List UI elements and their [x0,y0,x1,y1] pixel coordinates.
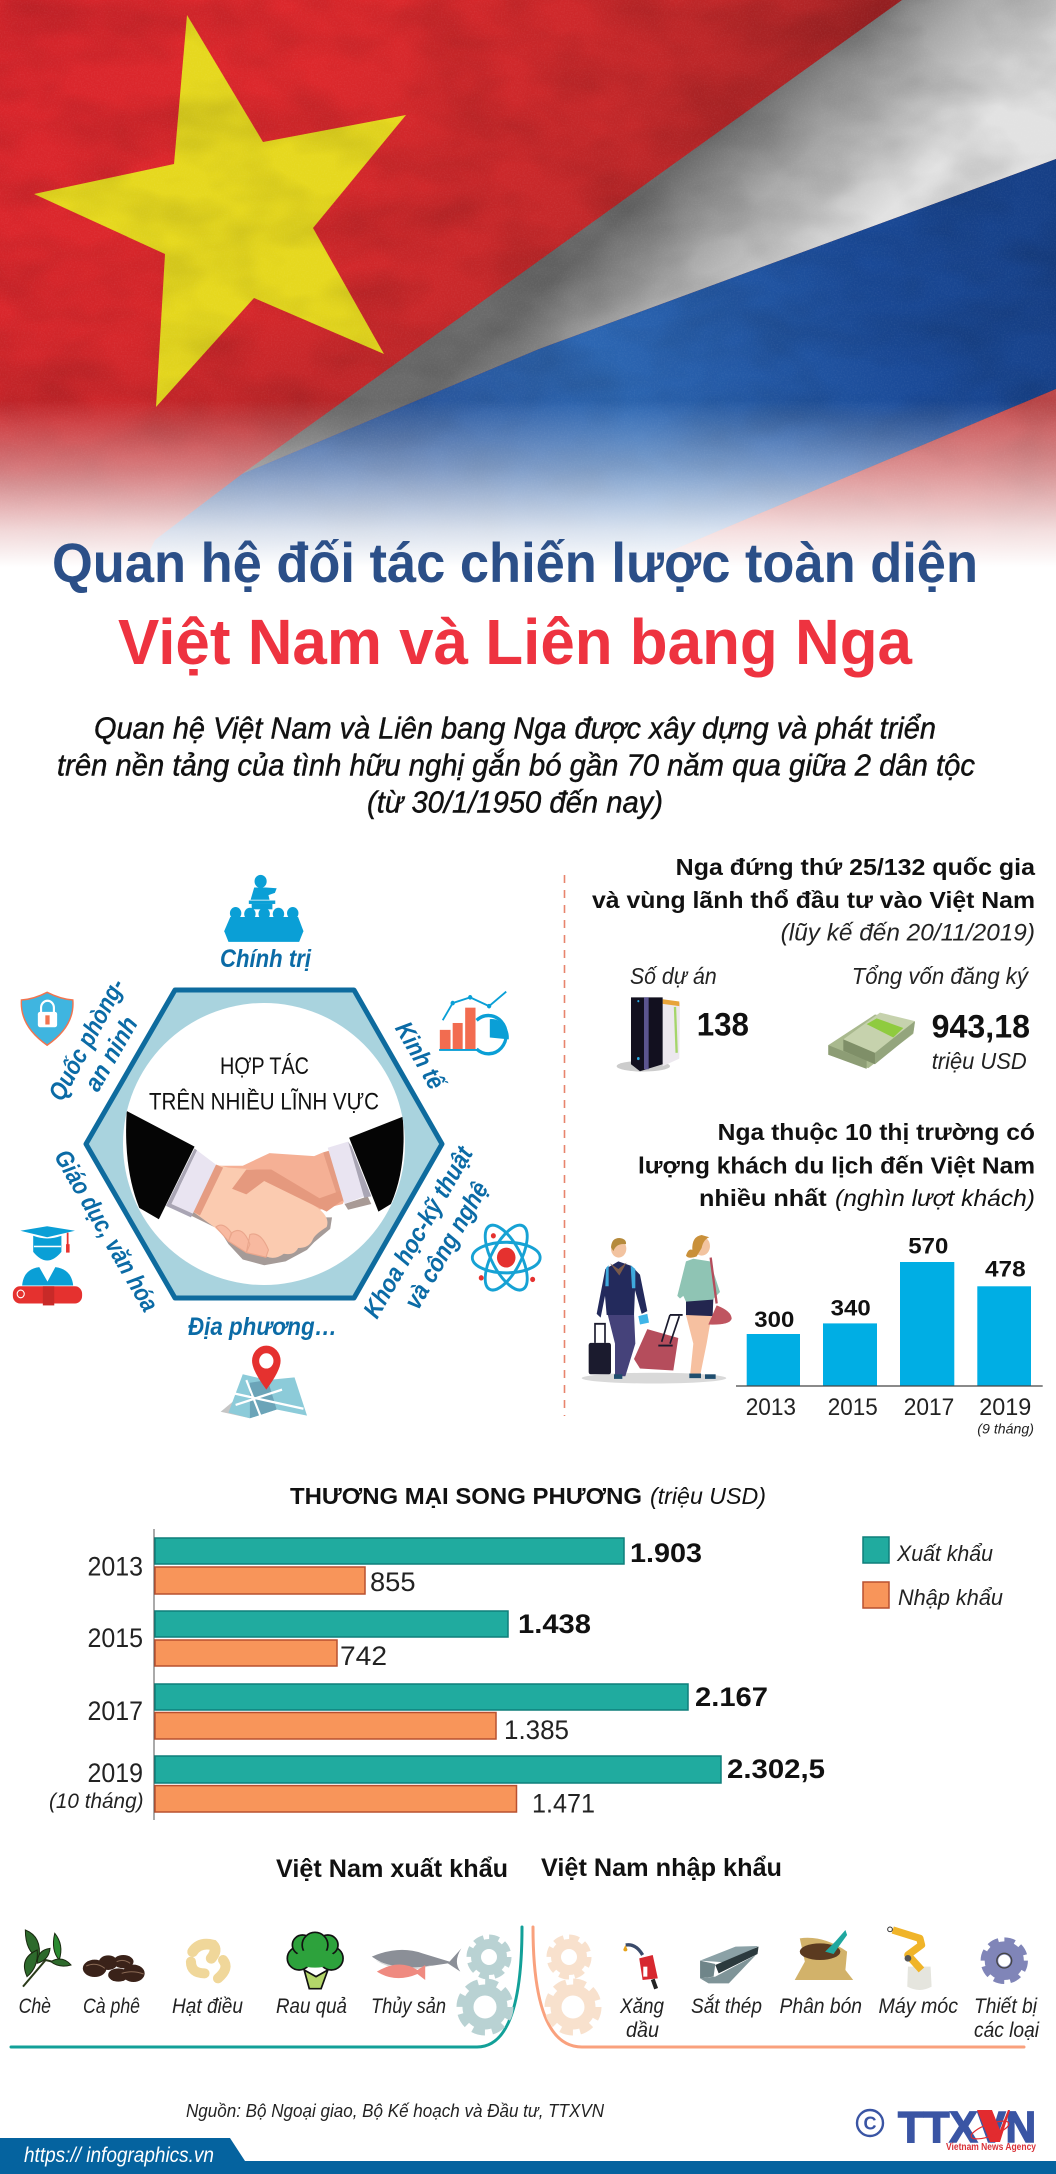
label: Địa phương: Địa phương… [188,1313,337,1341]
labels: imports [619,1993,1040,2042]
bar chart: trade: 2013 [88,1552,143,1582]
bar chart: tourists: 340 [831,1296,871,1321]
icon: fish [372,1948,461,1980]
title line 2: Việt Nam và Liên bang Nga [118,606,912,678]
hero: flags of Vietnam and Russia [0,0,1056,574]
logo: TTXVN: C [864,2114,876,2134]
bar chart: trade: 1.903 [630,1538,702,1568]
heading: investment rank: và vùng lãnh thổ đầu tư vào Việt Nam [592,887,1035,913]
panel: tourism [582,1119,1043,1437]
bar chart: trade: 1.438 [518,1609,591,1639]
bar chart: tourists: 2015 [828,1394,878,1421]
icon: yellow star [34,15,406,407]
labels: imports: Xăng [619,1994,664,2018]
center label: HỢP TÁC [220,1053,309,1080]
bar chart: tourists: 478 [985,1257,1026,1282]
hexagon [86,990,442,1298]
footer bar [0,2138,1056,2174]
panel: bilateral trade [49,1483,1003,1820]
icon: gears orange [549,1938,597,2031]
icon: security shield [21,992,73,1045]
illustration: travellers [582,1235,732,1383]
number: 138 projects: 138 [697,1007,749,1043]
icon: money stack [828,1013,915,1069]
bar chart: tourists: 2013 [746,1394,796,1421]
heading: imports: Việt Nam nhập khẩu [541,1854,782,1882]
labels: imports: Phân bón [780,1994,862,2018]
center label [149,1053,379,1116]
legend [863,1537,1003,1610]
bar chart: trade: 1.385 [504,1715,569,1745]
frame line: orange [533,1927,1024,2047]
heading: investment rank: Nga đứng thứ 25/132 quốc gia [676,854,1036,880]
icon: tea [23,1930,71,1987]
labels: exports: Hạt điều [172,1994,243,2018]
divider: dashed vertical line [564,875,566,1416]
bar chart: trade: 1.471 [532,1788,595,1818]
center label: TRÊN NHIỀU LĨNH VỰC [149,1088,379,1116]
panel: exports [11,1855,522,2047]
icon: gears teal [461,1938,509,2031]
bar chart: trade: 855 [370,1567,416,1597]
illustration: handshake [126,1111,404,1265]
label: Khoa học-kỹ thuật và công nghệ: Khoa học-kỹ thuật [358,1141,479,1323]
number: 943,18 million USD [932,1008,1030,1074]
legend: Nhập khẩu [898,1585,1003,1610]
heading: tourist market [638,1119,1035,1211]
icon: cashew [191,1944,226,1978]
labels: exports: Thủy sản [371,1994,446,2018]
labels: imports: dầu [626,2018,659,2042]
icon: broccoli [287,1932,343,1989]
icon: steel beam [700,1946,759,1983]
icon: server [617,997,680,1072]
bar chart: tourists: 2017 [904,1394,954,1421]
icon: coffee [83,1955,145,1982]
heading: tourist market: Nga thuộc 10 thị trường có [718,1119,1035,1145]
number: 943,18 million USD: triệu USD [932,1048,1027,1074]
bar chart: trade: 742 [340,1641,387,1671]
labels: exports: Chè [19,1994,51,2018]
icon: fuel nozzle [623,1945,658,1989]
icon: fertilizer sack [795,1930,853,1980]
label: Quốc phòng - an ninh: Quốc phòng- [43,974,131,1105]
label: Khoa học-kỹ thuật và công nghệ: và công nghệ [399,1177,494,1314]
legend: Xuất khẩu [896,1541,993,1566]
labels: exports: Rau quả [276,1994,347,2018]
heading: bilateral trade: THƯƠNG MẠI SONG PHƯƠNG [290,1483,642,1509]
icon: atom [472,1218,540,1297]
number: 943,18 million USD: 943,18 [932,1008,1030,1044]
heading: exports: Việt Nam xuất khẩu [276,1855,508,1883]
title line 1: Quan hệ đối tác chiến lược toàn diện [52,531,978,594]
logo: TTXVN: TTXVN [898,2103,1036,2152]
label: number of projects: Số dự án [630,963,717,989]
intro text: Quan hệ Việt Nam và Liên bang Nga được xây dựng và phát triển [94,710,936,746]
label: Chính trị: Chính trị [220,945,312,973]
note: cumulative date: (lũy kế đến 20/11/2019) [781,920,1035,947]
bar chart: tourists [736,1234,1043,1437]
source note: Nguồn: Bộ Ngoại giao, Bộ Kế hoạch và Đầu tư, TTXVN [186,2100,605,2121]
blue stripe [140,159,1056,570]
labels: imports: Máy móc [878,1994,958,2018]
bar chart: trade: 2017 [88,1696,143,1726]
intro text [57,710,975,820]
heading: tourist market: (nghìn lượt khách) [835,1185,1035,1211]
labels: imports: các loại [974,2018,1040,2042]
red stripe of Russian flag [610,389,1056,570]
heading: bilateral trade: (triệu USD) [650,1483,766,1509]
logo: TTXVN: Vietnam News Agency [946,2142,1036,2153]
bar chart: tourists: 2019 [979,1394,1031,1421]
label: Quốc phòng - an ninh: an ninh [79,1012,144,1096]
intro text: trên nền tảng của tình hữu nghị gắn bó gần 70 năm qua giữa 2 dân tộc [57,748,975,782]
bar chart: trade: 2.302,5 [727,1754,825,1784]
panel: cooperation hexagon [13,875,540,1418]
labels: imports: Sắt thép [691,1993,762,2018]
labels: imports: Thiết bị [974,1994,1038,2018]
panel: imports [533,1854,1040,2047]
heading: tourist market: lượng khách du lịch đến Việt Nam [638,1152,1035,1178]
bar chart: tourists: 570 [908,1234,948,1259]
icon: politics meeting [224,875,303,942]
bar chart: trade: 2015 [88,1623,143,1653]
intro text: (từ 30/1/1950 đến nay) [367,785,663,820]
bar chart: trade: (10 tháng) [49,1790,144,1813]
bar chart: trade [49,1529,825,1820]
labels: exports: Cà phê [83,1994,140,2018]
labels: exports [19,1994,446,2018]
heading: investment rank [592,854,1036,913]
white stripe [242,0,1056,474]
label: Kinh tế: Kinh tế [389,1017,451,1096]
bar chart: tourists: 300 [754,1307,794,1332]
heading: tourist market: nhiều nhất [699,1185,827,1211]
frame line: teal [11,1927,522,2047]
icon: robot arm [888,1927,932,1990]
icon: equipment gear [984,1941,1025,1981]
icon: graduate [13,1226,82,1305]
icon: map pin [221,1346,307,1418]
label: Giáo dục, văn hóa: Giáo dục, văn hóa [48,1145,164,1317]
icon: economy chart [439,992,509,1054]
footer bar: https:// infographics.vn [24,2144,214,2167]
bar chart: tourists: (9 tháng) [977,1421,1034,1437]
panel: investment [592,854,1036,1074]
bar chart: trade: 2.167 [695,1682,768,1712]
bar chart: trade: 2019 [88,1758,143,1788]
label: total capital: Tổng vốn đăng ký [852,963,1029,989]
